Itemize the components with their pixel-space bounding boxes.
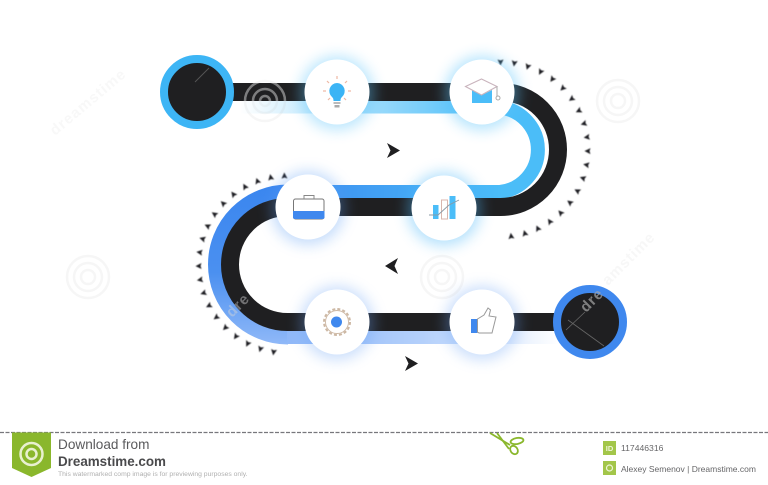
arrow: left, middle: [385, 258, 398, 274]
dotted arc: right: [498, 60, 591, 239]
icon: id badge: ID: [606, 444, 614, 453]
icon: id badge: [603, 441, 616, 455]
footer note: This watermarked comp image is for previewing purposes only.: [58, 471, 248, 478]
dotted arc: left: [195, 172, 287, 356]
watermark text: centre: dre: [223, 290, 253, 321]
icon: gear: [324, 309, 350, 335]
footer dashed line: [0, 432, 768, 434]
footer logo badge: [12, 432, 51, 477]
colored inner road: [215, 101, 560, 344]
watermark swirls: [67, 80, 639, 298]
icon: scissors: [490, 433, 524, 456]
dark winding road: [200, 92, 590, 322]
author credit: Alexey Semenov | Dreamstime.com: [621, 464, 756, 474]
icon: graduation cap: [466, 79, 500, 103]
arrow: right, upper: [387, 143, 400, 158]
watermark text: far right: amstime: [599, 229, 659, 289]
arrow: right, lower: [405, 356, 418, 371]
footer heading: Download from: [58, 437, 149, 452]
footer brand: Dreamstime.com: [58, 454, 166, 469]
icon: bar chart: [429, 196, 459, 219]
node: gear: [300, 286, 374, 360]
node: light bulb: [300, 56, 374, 130]
icon: thumbs up: [471, 308, 496, 333]
end circle: [557, 289, 623, 355]
watermark text: upper left: dreamstime: [47, 65, 130, 139]
node: bar chart: [407, 172, 481, 246]
node: graduation cap: [445, 56, 519, 130]
image id: 117446316: [621, 443, 664, 453]
icon: copyright badge: [603, 461, 616, 475]
icon: briefcase: [293, 196, 324, 219]
node: briefcase: [271, 171, 345, 245]
node: thumbs up: [445, 286, 519, 360]
watermark text: lower right: dre: [577, 285, 607, 316]
start circle: [164, 59, 230, 125]
icon: light bulb: [323, 76, 351, 108]
watermark swirl on road: [244, 83, 286, 101]
